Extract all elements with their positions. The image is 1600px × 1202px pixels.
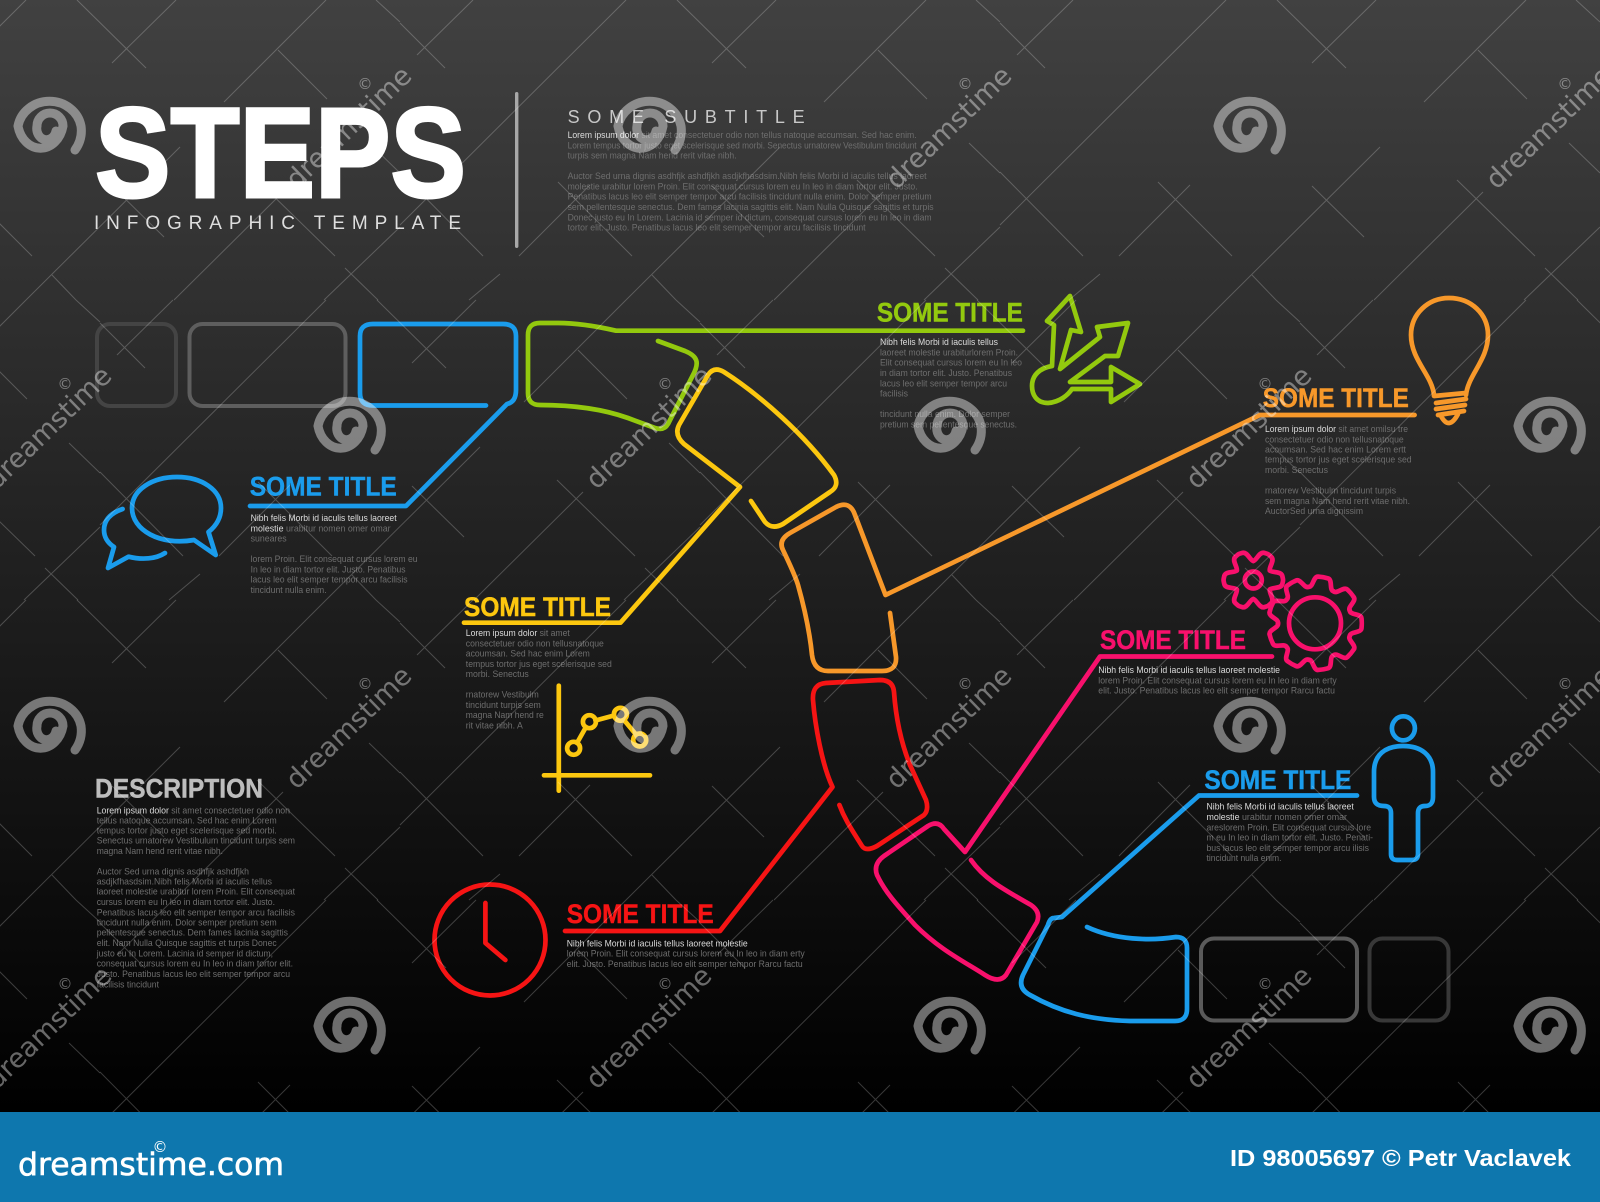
- description text: Penatibus lacus leo elit semper tempor arcu facilisis: [97, 906, 295, 917]
- watermark overlay: dreamstime: [580, 360, 718, 495]
- step 2 text: in diam tortor elit. Justo. Penatibus: [880, 367, 1012, 378]
- description text: Senectus urnatorew Vestibulum tincidunt turpis sem: [97, 835, 295, 846]
- icon: person: [1374, 716, 1433, 860]
- step 4 text: Lorem ipsum dolor sit amet omilsu tre: [1265, 423, 1408, 434]
- icon: gears: [1224, 549, 1362, 672]
- intro text block: Donec justo eu In Lorem. Lacinia id semper id dictum, consequat cursus lorem eu In leo in diam: [568, 211, 932, 222]
- inactive step box: faint: [97, 324, 176, 406]
- step 3 text: tempus tortor jus eget scelerisque sed: [466, 658, 612, 669]
- step 7 text: areslorem Proin. Elit consequat cursus lore: [1206, 821, 1371, 832]
- step 5 text: [567, 937, 805, 969]
- step 5 text: lorem Proin. Elit consequat cursus lorem eu In leo in diam erty: [567, 948, 805, 959]
- watermark overlay: ©: [1258, 375, 1272, 393]
- description text: pellentesque senectus. Dem fames lacinia sagittis: [97, 927, 288, 938]
- step 2 text: [880, 336, 1022, 429]
- description text: elit. Nam Nulla Quisque sagittis et turpis Donec: [97, 937, 277, 948]
- description text: asdjkfhasdsim.Nibh felis Morbi id iaculis tellus: [97, 875, 272, 886]
- description text: Justo. Penatibus lacus leo elit semper tempor arcu: [97, 968, 290, 979]
- intro text block: molestie urabitur lorem Proin. Elit consequat cursus lorem eu In leo in diam tortor elit. Justo.: [568, 180, 918, 191]
- description text: tincidunt nulla enim. Dolor semper pretium sem: [97, 917, 277, 928]
- step 1 text: Nibh felis Morbi id iaculis tellus laoreet: [251, 512, 397, 523]
- watermark overlay: dreamstime: [580, 960, 718, 1095]
- description text: tempus tortor justo eget scelerisque sed morbi.: [97, 824, 277, 835]
- description heading: DESCRIPTION: [95, 774, 263, 804]
- watermark overlay: ©: [658, 975, 672, 993]
- step 1 connector: blue: [250, 324, 516, 506]
- step 6 title: SOME TITLE: [1100, 625, 1246, 655]
- step 3 text: acoumsan. Sed hac enim Lorem: [466, 648, 590, 659]
- step 7 text: Nibh felis Morbi id iaculis tellus laoreet: [1206, 801, 1354, 812]
- header divider: [515, 92, 518, 248]
- description text: magna Nam hend rerit vitae nibh.: [97, 845, 223, 856]
- step 6 connector: pink: [876, 656, 1272, 980]
- step 3 text: [466, 627, 612, 730]
- step 1 text: In leo in diam tortor elit. Justo. Penatibus: [251, 563, 406, 574]
- watermark overlay: ©: [958, 675, 972, 693]
- intro text block: sem pellentesque senectus. Dem fames lacinia sagittis elit. Nam Nulla Quisque sagittis et turpis: [568, 201, 934, 212]
- step 6 text: lorem Proin. Elit consequat cursus lorem eu In leo in diam erty: [1098, 674, 1337, 685]
- title: STEPS: [95, 82, 466, 225]
- watermark overlay: dreamstime: [280, 660, 418, 795]
- step 1 title: SOME TITLE: [250, 472, 397, 502]
- intro text block: Penatibus lacus leo elit semper tempor arcu facilisis tincidunt nulla enim. Dolor semper pretium: [568, 191, 932, 202]
- step 3 text: rnatorew Vestibulm: [466, 689, 539, 700]
- step 4 text: rnatorew Vestibulm tincidunt turpis: [1265, 485, 1396, 496]
- step 3 text: rit vitae nibh. A: [466, 719, 523, 730]
- step 1 text: [251, 512, 418, 595]
- description text: facilisis tincidunt: [97, 978, 159, 989]
- footer bar: [0, 1112, 1600, 1202]
- intro text block: tortor elit. Justo. Penatibus lacus leo elit semper tempor arcu facilisis tincidunt: [568, 222, 866, 233]
- step 1 text: molestie urabitur nomen omer omar: [251, 522, 391, 533]
- step 3 text: magna Nam hend re: [466, 709, 544, 720]
- description text: cursus lorem eu In leo in diam tortor elit. Justo.: [97, 896, 275, 907]
- step 4 text: sem magna Nam hend rerit vitae nibh.: [1265, 495, 1410, 506]
- step 1 text: tincidunt nulla enim.: [251, 584, 327, 595]
- watermark overlay: ©: [358, 675, 372, 693]
- step 2 text: facilisis: [880, 387, 908, 398]
- step 2 text: lacus leo elit semper tempor arcu: [880, 377, 1007, 388]
- step 5 title: SOME TITLE: [567, 899, 714, 929]
- step 2 text: laoreet molestie urabiturlorem Proin.: [880, 346, 1018, 357]
- step 5 text: Nibh felis Morbi id iaculis tellus laoreet molestie: [567, 937, 748, 948]
- icon: light bulb: [1411, 298, 1488, 423]
- step 7 text: molestie urabitur nomen omer omar: [1206, 811, 1347, 822]
- step 4 text: morbi. Senectus: [1265, 464, 1328, 475]
- step 5 text: elit. Justo. Penatibus lacus leo elit semper tempor Rarcu factu: [567, 958, 803, 969]
- watermark overlay: ©: [658, 375, 672, 393]
- step 1 text: lorem Proin. Elit consequat cursus lorem eu: [251, 553, 418, 564]
- step 4 text: consectetuer odio non tellusnatoque: [1265, 433, 1404, 444]
- description text: Lorem ipsum dolor sit amet consectetuer odio non: [97, 804, 290, 815]
- watermark overlay: dreamstime: [1180, 960, 1318, 1095]
- step 3 text: morbi. Senectus: [466, 668, 529, 679]
- description text: laoreet molestie urabitur lorem Proin. Elit consequat: [97, 886, 295, 897]
- step 3 text: Lorem ipsum dolor sit amet: [466, 627, 570, 638]
- step 7 text: tincidunt nulla enim.: [1206, 852, 1282, 863]
- step 7 connector: blue: [1021, 796, 1357, 1021]
- icon: branching arrows: [1032, 296, 1140, 403]
- step 3 text: consectetuer odio non tellusnatoque: [466, 637, 604, 648]
- watermark overlay: ©: [1558, 75, 1572, 93]
- footer bar: dreamstime.com: [18, 1147, 284, 1183]
- step 2 text: pretium sem pellentesque senectus.: [880, 418, 1017, 429]
- watermark overlay: ©: [358, 75, 372, 93]
- watermark overlay: dreamstime: [880, 660, 1018, 795]
- watermark overlay: ©: [1558, 675, 1572, 693]
- subtitle: SOME SUBTITLE: [568, 107, 805, 127]
- footer bar: ©: [152, 1138, 168, 1156]
- step 2 connector: green: [528, 323, 1023, 429]
- inactive step box: grey: [190, 324, 346, 406]
- watermark overlay: ©: [958, 75, 972, 93]
- watermark overlay: dreamstime: [880, 60, 1018, 195]
- inactive step box: grey: [1201, 938, 1357, 1020]
- inactive step box: faint: [1370, 938, 1448, 1020]
- icon: clock: [434, 884, 546, 996]
- intro text block: Lorem ipsum dolor sit amet consectetuer odio non tellus natoque accumsan. Sed hac enim.: [568, 129, 917, 140]
- step 6 text: elit. Justo. Penatibus lacus leo elit semper tempor Rarcu factu: [1098, 685, 1335, 696]
- step 7 text: m eu In leo in diam tortor elit. Justo. Penati-: [1206, 832, 1373, 843]
- step 2 text: Nibh felis Morbi id iaculis tellus: [880, 336, 998, 347]
- description text: consequat cursus lorem eu In leo in diam tortor elit.: [97, 957, 293, 968]
- icon: line chart: [544, 686, 650, 791]
- icon: speech bubbles: [104, 477, 221, 568]
- step 5 connector: red: [565, 680, 927, 931]
- description text: justo eu In Lorem. Lacinia id semper id dictum,: [96, 947, 273, 958]
- watermark overlay: ©: [1258, 975, 1272, 993]
- description text: Auctor Sed urna dignis asdhfjk ashdfjkh: [97, 865, 249, 876]
- watermark overlay: ©: [58, 975, 72, 993]
- step 3 title: SOME TITLE: [464, 592, 611, 622]
- step 4 text: acoumsan. Sed hac enim Lorem ertt: [1265, 443, 1406, 454]
- step 2 text: Elit consequat cursus lorem eu In leo: [880, 357, 1022, 368]
- step 6 text: [1098, 664, 1337, 696]
- step 6 text: Nibh felis Morbi id iaculis tellus laoreet molestie: [1098, 664, 1280, 675]
- step 1 text: suneares: [251, 533, 287, 544]
- intro text block: turpis sem magna Nam hend rerit vitae nibh.: [568, 150, 737, 161]
- step 7 title: SOME TITLE: [1204, 765, 1351, 795]
- step 7 text: bus lacus leo elit semper tempor arcu ilisis: [1206, 842, 1369, 853]
- step 4 title: SOME TITLE: [1263, 383, 1409, 413]
- intro text block: Lorem tempus tortor justo eget scelerisque sed morbi. Senectus urnatorew Vestibulum tincidunt: [568, 139, 917, 150]
- description text: tellus natoque accumsan. Sed hac enim Lorem: [97, 814, 277, 825]
- step 4 text: AuctorSed urna dignissim: [1265, 505, 1363, 516]
- step 4 text: tempus tortor jus eget scelerisque sed: [1265, 454, 1412, 465]
- step 3 connector: yellow: [464, 370, 836, 623]
- description text: [96, 804, 295, 989]
- step 2 text: tincidunt nulla enim. Dolor semper: [880, 408, 1010, 419]
- intro text block: Auctor Sed urna dignis asdhfjk ashdfjkh asdjkfhasdsim.Nibh felis Morbi id iaculis tellus laoreet: [568, 170, 927, 181]
- step 7 text: [1206, 801, 1373, 863]
- step 4 text: [1265, 423, 1412, 516]
- step 3 text: tincidunt turpis sem: [466, 699, 541, 710]
- step 4 connector: orange: [782, 415, 1415, 671]
- watermark overlay: dreamstime: [1180, 360, 1318, 495]
- watermark overlay: ©: [58, 375, 72, 393]
- watermark overlay: dreamstime: [280, 60, 418, 195]
- step 1 text: lacus leo elit semper tempor arcu facilisis: [251, 574, 408, 585]
- footer bar: ID 98005697 © Petr Vaclavek: [1230, 1145, 1572, 1171]
- step 2 title: SOME TITLE: [877, 298, 1023, 328]
- intro text block: [568, 129, 934, 233]
- tagline: INFOGRAPHIC TEMPLATE: [94, 213, 461, 234]
